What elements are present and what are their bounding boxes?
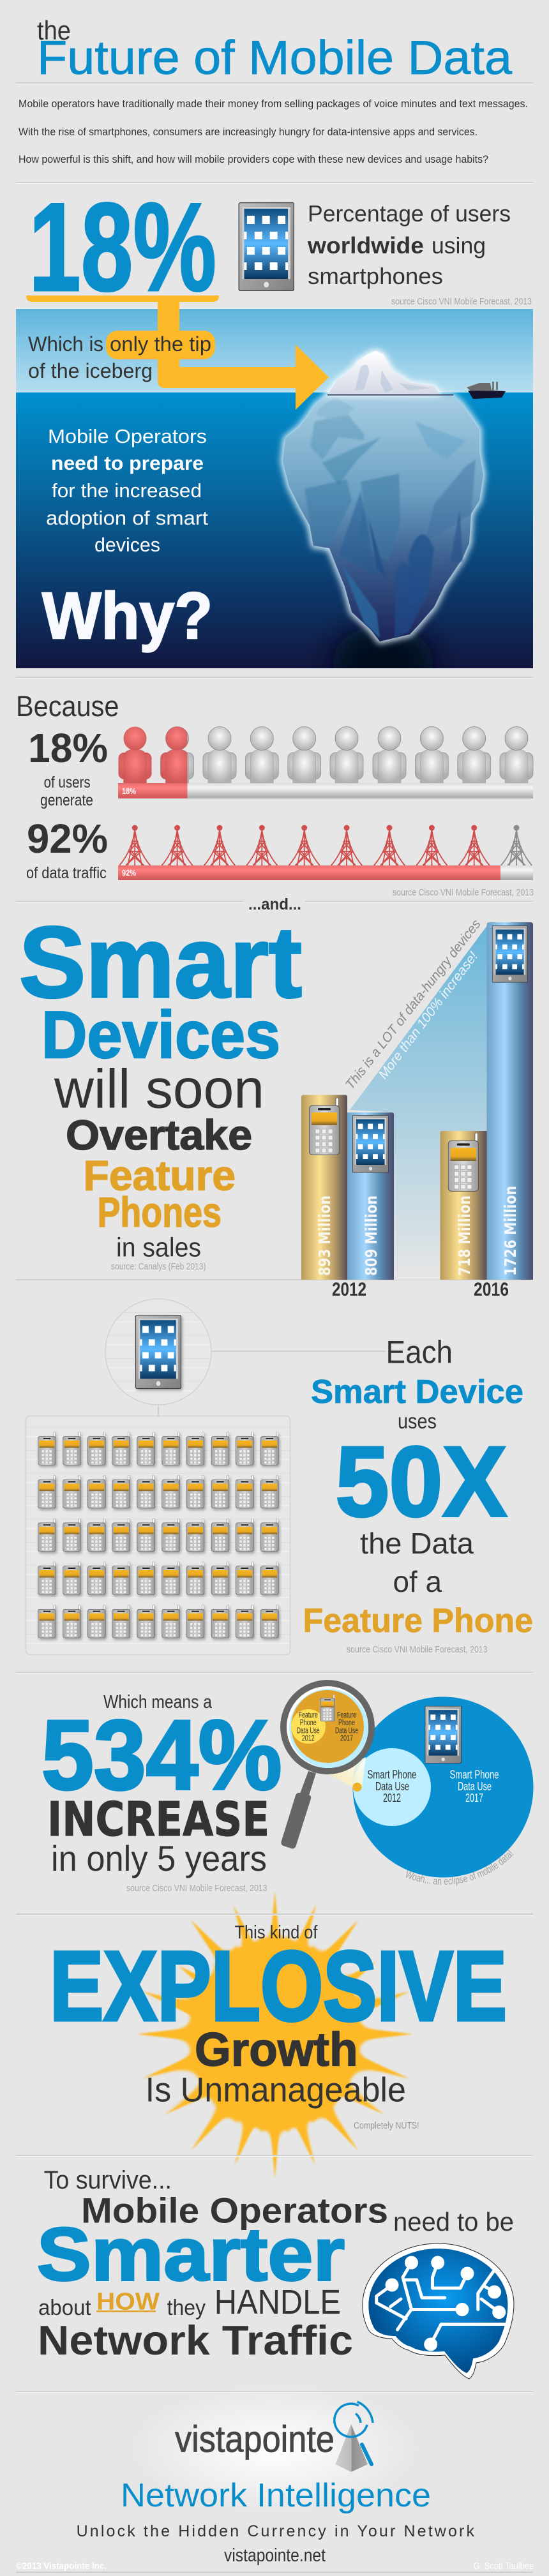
source note: source: Canalys (Feb 2013) bbox=[111, 1261, 206, 1272]
progress bar: 92%: 92% bbox=[122, 868, 136, 878]
text: to survive mobile operators need to be smarter: HOW bbox=[96, 2289, 160, 2316]
text: to survive mobile operators need to be smarter: Mobile Operators bbox=[81, 2190, 388, 2230]
stat: 18% of users generate: generate bbox=[40, 791, 93, 809]
text: each smart device uses 50x the data of a feature phone: 50X bbox=[336, 1427, 507, 1538]
footer glow bbox=[132, 2385, 419, 2512]
label: smart phone data use 2017: Data Use bbox=[458, 1780, 492, 1793]
heading: smart devices overtake feature phones: Overtake bbox=[66, 1111, 252, 1158]
text: to survive mobile operators need to be smarter: need to be bbox=[393, 2207, 514, 2236]
text: which means a 534% increase in only 5 years: in only 5 years bbox=[51, 1838, 267, 1878]
label: feature phone data use 2017: Feature bbox=[337, 1710, 356, 1719]
label: smart phone data use 2012 bbox=[368, 1769, 416, 1804]
stat: 92% of data traffic: 92% bbox=[27, 816, 108, 862]
text: percentage of users worldwide using smartphones bbox=[307, 200, 511, 289]
copyright: ©2013 Vistapointe Inc. bbox=[16, 2561, 107, 2572]
icon: feature phone bbox=[320, 1695, 335, 1721]
heading: smart devices overtake feature phones: Smart bbox=[19, 906, 302, 1019]
callout: more than 100% increase: More than 100% increase! bbox=[376, 949, 481, 1082]
text: which means a 534% increase in only 5 years: INCREASE bbox=[47, 1792, 269, 1847]
bar: 2012 feature phones bbox=[301, 1095, 347, 1280]
text: each smart device uses 50x the data of a feature phone: Feature Phone bbox=[303, 1602, 533, 1640]
bar: 2016 feature phones bbox=[440, 1131, 486, 1280]
underline bar bbox=[26, 296, 219, 302]
text: which is only the tip of the iceberg: only the tip bbox=[110, 333, 211, 356]
text: which is only the tip of the iceberg: of the iceberg bbox=[28, 359, 153, 382]
text: each smart device uses 50x the data of a feature phone: uses bbox=[398, 1409, 437, 1433]
heading: smart devices overtake feature phones bbox=[19, 906, 302, 1262]
panel: iceberg bbox=[16, 296, 533, 702]
text: mobile operators need to prepare: Mobile Operators bbox=[48, 425, 207, 447]
bar: 2016 smart devices bbox=[486, 922, 533, 1280]
text: this kind of explosive growth is unmanageable: Growth bbox=[195, 2023, 358, 2076]
label: smart phone data use 2012: Smart Phone bbox=[368, 1769, 416, 1781]
text: and: ...and... bbox=[248, 895, 301, 913]
chart: smart phone data use circles bbox=[352, 1696, 534, 1886]
label: feature phone data use 2012: Phone bbox=[300, 1718, 317, 1727]
bar: 2016 smart devices: 1726 Million bbox=[501, 1186, 520, 1276]
text: each smart device uses 50x the data of a feature phone bbox=[303, 1335, 533, 1640]
intro text block bbox=[19, 98, 528, 165]
text: which is only the tip of the iceberg: Which is bbox=[28, 333, 103, 356]
heading: smart devices overtake feature phones: Phones bbox=[97, 1188, 222, 1236]
arrow: highlight connector bbox=[158, 302, 329, 410]
tagline: Unlock the Hidden Currency in Your Network bbox=[77, 2522, 475, 2540]
axis label: 2016: 2016 bbox=[474, 1279, 509, 1300]
progress bar: 18% bbox=[118, 783, 533, 798]
bar: 2012 smart devices: 809 Million bbox=[362, 1195, 380, 1276]
label: feature phone data use 2017: Data Use bbox=[335, 1726, 358, 1735]
intro text block: With the rise of smartphones, consumers are increasingly hungry for data-intensive apps and services. bbox=[19, 126, 478, 138]
heading: smart devices overtake feature phones: in sales bbox=[116, 1232, 201, 1262]
label: smart phone data use 2017 bbox=[449, 1769, 499, 1804]
bar: 2012 feature phones: 893 Million bbox=[315, 1195, 334, 1276]
text: to survive mobile operators need to be smarter bbox=[37, 2166, 514, 2363]
label: smart phone data use 2017: 2017 bbox=[465, 1792, 483, 1804]
pictogram: cell towers bbox=[119, 825, 532, 865]
feature phone grid bbox=[26, 1416, 290, 1654]
bar: 2012 smart devices bbox=[347, 1112, 394, 1280]
title: the: the bbox=[37, 15, 71, 45]
text: each smart device uses 50x the data of a feature phone: of a bbox=[393, 1565, 442, 1598]
text: mobile operators need to prepare bbox=[46, 425, 208, 556]
heading: smart devices overtake feature phones: Devices bbox=[41, 998, 280, 1072]
text: each smart device uses 50x the data of a feature phone: the Data bbox=[360, 1527, 474, 1560]
text: to survive mobile operators need to be smarter: HANDLE bbox=[214, 2283, 341, 2321]
text: mobile operators need to prepare: adoption of smart bbox=[46, 507, 208, 529]
sea bbox=[16, 393, 533, 668]
text: percentage of users worldwide using smartphones: worldwide bbox=[307, 232, 424, 258]
text: each smart device uses 50x the data of a feature phone: Smart Device bbox=[311, 1374, 523, 1411]
icon: ship bbox=[467, 382, 506, 399]
bar chart: device sales bbox=[301, 917, 533, 1300]
text: each smart device uses 50x the data of a feature phone: Each bbox=[386, 1335, 453, 1370]
stat: 18%: 18% bbox=[29, 177, 216, 317]
label: smart phone data use 2012: 2012 bbox=[383, 1792, 401, 1804]
stat: 92% of data traffic bbox=[26, 816, 108, 882]
smart device circle bbox=[105, 1299, 211, 1405]
label: feature phone data use 2017 bbox=[335, 1710, 358, 1743]
text: percentage of users worldwide using smartphones: Percentage of users bbox=[308, 200, 511, 227]
label: feature phone data use 2012: 2012 bbox=[302, 1734, 315, 1743]
label: feature phone data use 2017: Phone bbox=[338, 1718, 355, 1727]
bar: 2016 feature phones: 718 Million bbox=[455, 1195, 474, 1276]
source note: source Cisco VNI Mobile Forecast, 2013 bbox=[347, 1644, 488, 1655]
logo: vistapointe: vistapointe bbox=[175, 2419, 335, 2460]
stat: 18% of users generate: of users bbox=[44, 774, 91, 791]
text: mobile operators need to prepare: need to prepare bbox=[51, 452, 204, 474]
label: feature phone data use 2012: Data Use bbox=[297, 1726, 320, 1735]
label: feature phone data use 2012: Feature bbox=[299, 1710, 318, 1719]
icon: magnifying glass bbox=[281, 1683, 372, 1848]
callout: data-hungry devices: This is a LOT of data-hungry devices bbox=[343, 917, 484, 1092]
heading: why: Why? bbox=[42, 579, 213, 652]
icon: tablet bbox=[425, 1706, 462, 1764]
logo: vistapointe bbox=[175, 2402, 373, 2472]
progress bar: 92% bbox=[118, 865, 533, 880]
panel: one smart device vs fifty feature phones bbox=[26, 1299, 386, 1654]
text: to survive mobile operators need to be smarter: To survive... bbox=[44, 2166, 172, 2194]
label: feature phone data use 2012 bbox=[297, 1710, 320, 1743]
text: which means a 534% increase in only 5 years: 534% bbox=[41, 1700, 282, 1810]
progress bar: 18%: 18% bbox=[122, 786, 136, 796]
heading: smart devices overtake feature phones: Feature bbox=[83, 1151, 236, 1199]
text: to survive mobile operators need to be smarter: they bbox=[167, 2296, 206, 2320]
sunburst behind explosive growth bbox=[137, 1891, 413, 2178]
icon: circuit brain bbox=[363, 2243, 514, 2379]
text: percentage of users worldwide using smartphones: using bbox=[432, 232, 486, 258]
text: this kind of explosive growth is unmanageable bbox=[50, 1922, 507, 2109]
sky bbox=[16, 309, 533, 393]
title: Future of Mobile Data: Future of Mobile Data bbox=[37, 31, 512, 84]
heading: smart devices overtake feature phones: will soon bbox=[54, 1058, 264, 1120]
highlight pill bbox=[106, 331, 215, 359]
website: vistapointe.net bbox=[224, 2545, 326, 2566]
stat: 18% of users generate: 18% bbox=[28, 725, 108, 771]
text: this kind of explosive growth is unmanageable: Is Unmanageable bbox=[146, 2071, 406, 2109]
text: to survive mobile operators need to be smarter: Network Traffic bbox=[38, 2317, 353, 2363]
iceberg illustration bbox=[283, 351, 483, 702]
text: mobile operators need to prepare: for the increased bbox=[52, 479, 202, 502]
stat: 92% of data traffic: of data traffic bbox=[26, 864, 107, 882]
stat: 18% of users generate bbox=[28, 725, 108, 809]
text: to survive mobile operators need to be smarter: about bbox=[38, 2296, 91, 2320]
label: smart phone data use 2017: Smart Phone bbox=[449, 1769, 499, 1781]
text: which means a 534% increase in only 5 years: Which means a bbox=[103, 1692, 213, 1712]
text: to survive mobile operators need to be smarter: Smarter bbox=[37, 2212, 345, 2296]
heading: network intelligence: Network Intelligence bbox=[121, 2477, 431, 2514]
credit: G. Scott Taulbee bbox=[474, 2561, 534, 2572]
intro text block: Mobile operators have traditionally made their money from selling packages of voice minutes and text messages. bbox=[19, 98, 528, 110]
text: which is only the tip of the iceberg bbox=[28, 333, 211, 382]
label: smart phone data use 2012: Data Use bbox=[375, 1780, 409, 1793]
heading: because: Because bbox=[16, 690, 119, 723]
text: mobile operators need to prepare: devices bbox=[94, 534, 160, 556]
axis label: 2012: 2012 bbox=[332, 1279, 366, 1300]
text: this kind of explosive growth is unmanageable: This kind of bbox=[235, 1922, 318, 1943]
source note: source Cisco VNI Mobile Forecast, 2013 bbox=[126, 1883, 267, 1894]
curved caption: eclipse of mobile data: Woah... an eclipse of mobile data! bbox=[406, 1850, 513, 1886]
label: feature phone data use 2017: 2017 bbox=[340, 1734, 353, 1743]
growth wedge bbox=[350, 926, 486, 1280]
text: percentage of users worldwide using smartphones: smartphones bbox=[308, 263, 443, 289]
intro text block: How powerful is this shift, and how will mobile providers cope with these new devices and usage habits? bbox=[19, 153, 488, 165]
pictogram: people bbox=[119, 726, 533, 783]
text: which means a 534% increase in only 5 years bbox=[41, 1692, 282, 1878]
note: completely nuts: Completely NUTS! bbox=[354, 2120, 419, 2131]
icon: tablet bbox=[239, 203, 294, 290]
